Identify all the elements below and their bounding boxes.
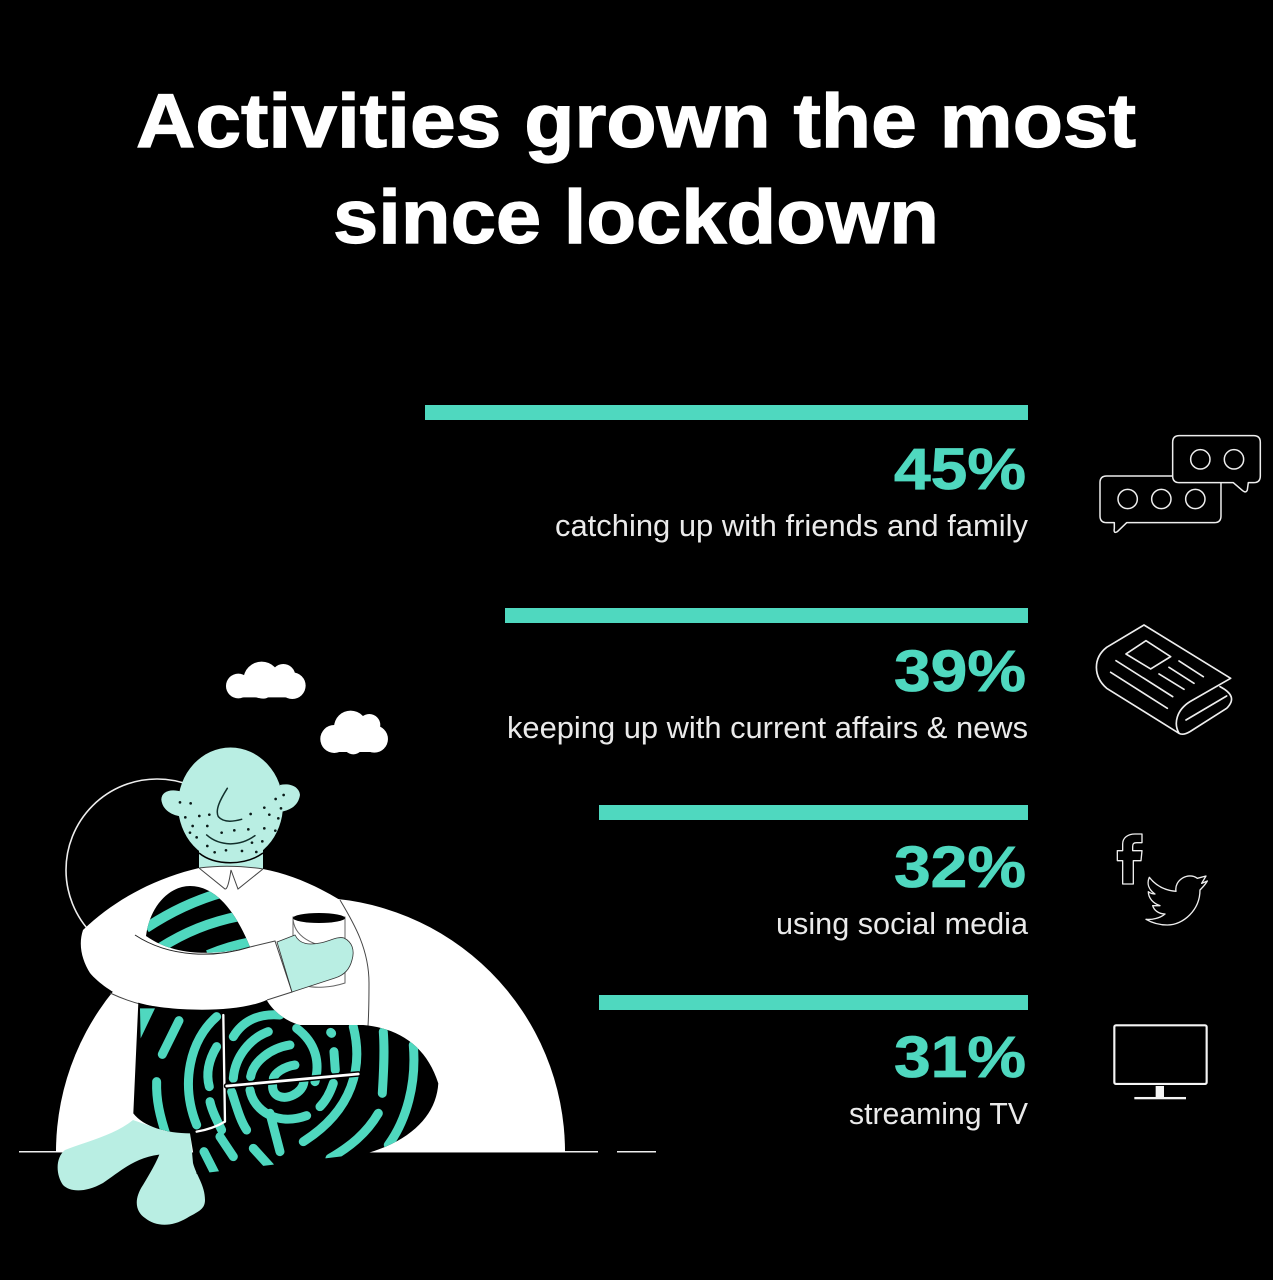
ground line xyxy=(19,1151,656,1152)
icon: television xyxy=(1114,1025,1207,1099)
striped knee xyxy=(135,886,252,955)
coffee cup xyxy=(293,913,345,987)
stat: streaming TV: 31% xyxy=(894,1025,1026,1090)
stat: social media: 32% xyxy=(894,835,1026,900)
white shirt body and arm xyxy=(81,867,369,1026)
stat: current affairs and news: 39% xyxy=(894,639,1026,704)
illustration: seated person xyxy=(58,748,438,1225)
white dome xyxy=(56,898,565,1152)
cloud: left xyxy=(226,662,306,699)
icon: chat bubbles xyxy=(1100,436,1260,532)
shirt outlines and collar xyxy=(110,866,369,1026)
trouser seams xyxy=(197,1015,358,1132)
foot: left xyxy=(58,1120,170,1190)
neck xyxy=(199,850,263,872)
title xyxy=(136,79,1136,260)
icon: facebook logo xyxy=(1117,834,1142,884)
hand xyxy=(277,935,353,992)
stat: streaming TV: streaming TV xyxy=(849,1096,1028,1131)
cloud: right xyxy=(320,711,388,754)
stat: current affairs and news xyxy=(505,608,1028,745)
stat: catching up with friends and family: 45% xyxy=(894,437,1026,502)
stat: catching up with friends and family: catching up with friends and family xyxy=(555,508,1028,543)
black fingerprint trousers xyxy=(133,1000,438,1174)
thin circle behind person xyxy=(66,779,248,961)
icon: newspaper xyxy=(1096,625,1232,734)
foot: right xyxy=(137,1130,205,1225)
stat: current affairs and news: keeping up with current affairs & news xyxy=(507,710,1028,745)
stat: social media: using social media xyxy=(776,906,1029,941)
icon: twitter bird xyxy=(1146,876,1207,925)
stat: catching up with friends and family xyxy=(425,405,1028,543)
stat: social media xyxy=(599,805,1029,941)
title: Activities grown the most xyxy=(136,79,1136,164)
title: since lockdown xyxy=(333,175,939,260)
stat: streaming TV xyxy=(599,995,1028,1131)
head xyxy=(161,748,300,863)
